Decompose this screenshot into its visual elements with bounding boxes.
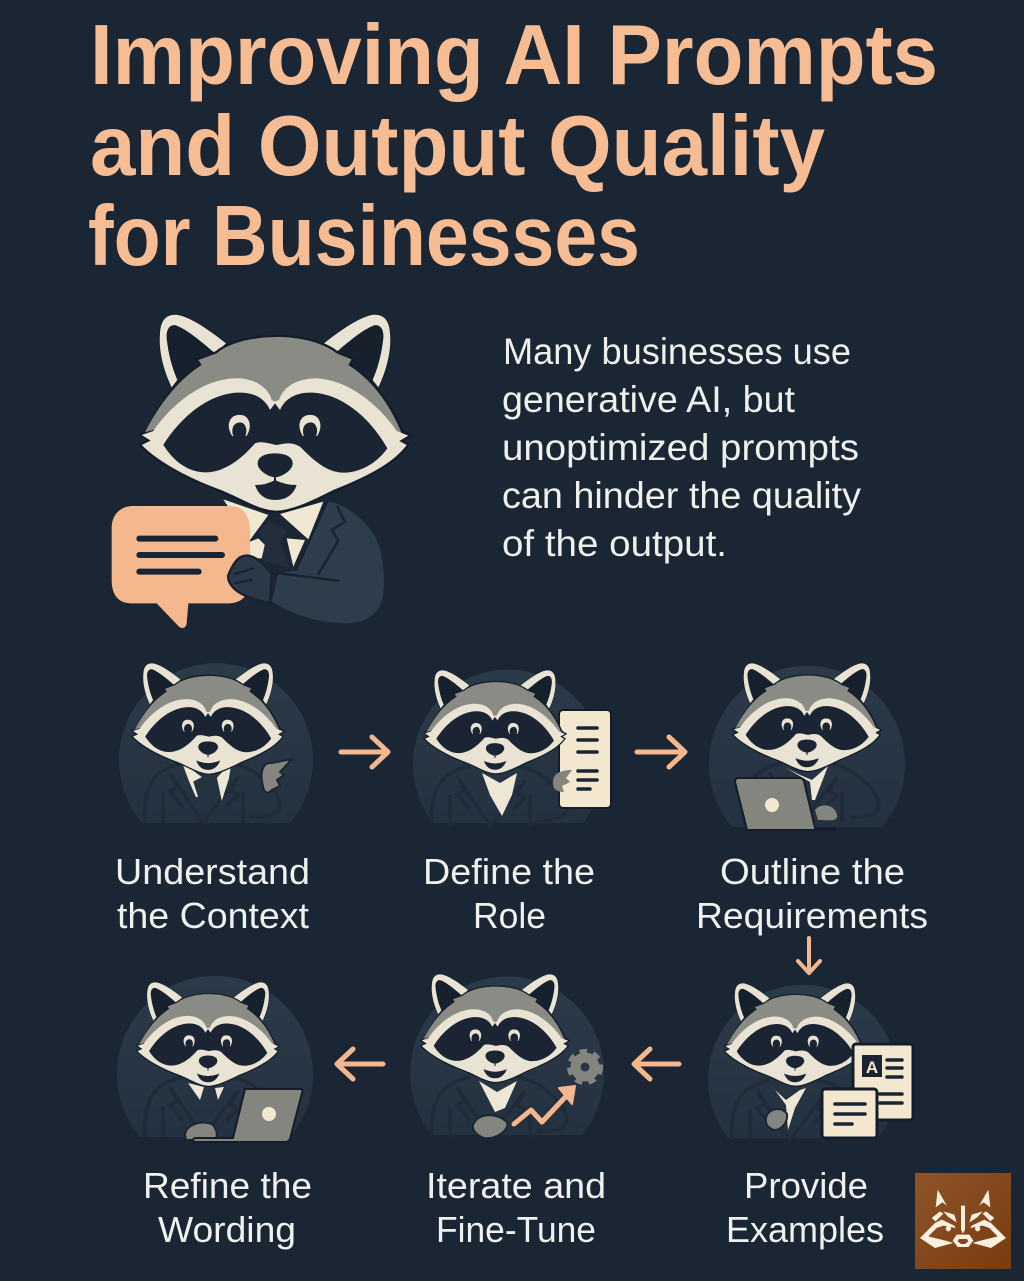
intro text: Many businesses use — [503, 331, 851, 372]
step 2: define the role — [413, 670, 611, 936]
growth arrow — [514, 1086, 575, 1124]
title — [88, 8, 938, 284]
main raccoon with speech bubble — [112, 315, 408, 628]
step 5 illustration — [410, 974, 604, 1138]
step 4 label: Provide — [744, 1165, 868, 1206]
title: Improving AI Prompts — [90, 8, 938, 103]
step 5: iterate and fine-tune — [410, 974, 606, 1250]
gear icon — [570, 1052, 600, 1082]
step 4 label — [726, 1165, 884, 1250]
step 4 illustration — [708, 983, 913, 1140]
title: and Output Quality — [90, 99, 825, 194]
step 3 label: Outline the — [720, 851, 905, 892]
intro text: of the output. — [502, 523, 727, 564]
arrow: step 1 to 2 — [341, 737, 388, 767]
step 3 label: Requirements — [696, 895, 928, 936]
laptop — [735, 778, 835, 830]
raccoon hand — [228, 556, 272, 603]
step 1: understand the context — [115, 663, 313, 936]
raccoon shirt — [223, 499, 323, 567]
speech bubble — [112, 506, 250, 628]
step 1 label — [115, 851, 310, 936]
step 3 illustration — [709, 663, 905, 830]
step 2 label: Define the — [423, 851, 595, 892]
step 5 label: Iterate and — [426, 1165, 606, 1206]
step 6: refine the wording — [117, 976, 313, 1250]
title: for Businesses — [88, 189, 640, 284]
intro text: generative AI, but — [502, 379, 796, 420]
raccoon jacket — [272, 502, 384, 623]
arrow: step 4 to 5 — [634, 1049, 679, 1079]
step 1 illustration — [119, 663, 313, 823]
arrow: step 2 to 3 — [637, 737, 685, 767]
pointing hand — [262, 759, 292, 793]
step 5 label: Fine-Tune — [436, 1209, 596, 1250]
logo badge — [915, 1173, 1011, 1269]
step 1 label: the Context — [117, 895, 309, 936]
arrow: step 5 to 6 — [337, 1049, 383, 1079]
arrow: step 3 to 4 — [798, 938, 820, 973]
step 6 label: Wording — [158, 1209, 296, 1250]
step 4: provide examples — [708, 983, 913, 1250]
raccoon tie — [258, 522, 290, 568]
step 6 label: Refine the — [143, 1165, 312, 1206]
step 3: outline the requirements — [696, 663, 928, 936]
step 5 label — [426, 1165, 606, 1250]
step 2 illustration — [413, 670, 611, 826]
documents: A — [866, 1058, 878, 1077]
step 3 label — [696, 851, 928, 936]
step 2 label — [423, 851, 595, 936]
intro text: can hinder the quality — [502, 475, 861, 516]
step 4 label: Examples — [726, 1209, 884, 1250]
step 6 label — [143, 1165, 312, 1250]
documents — [822, 1044, 913, 1138]
step 6 illustration — [117, 976, 313, 1142]
intro text: unoptimized prompts — [502, 427, 859, 468]
step 2 label: Role — [473, 895, 546, 936]
intro text — [502, 331, 861, 564]
document — [559, 710, 611, 808]
laptop — [193, 1089, 302, 1142]
step 1 label: Understand — [115, 851, 310, 892]
